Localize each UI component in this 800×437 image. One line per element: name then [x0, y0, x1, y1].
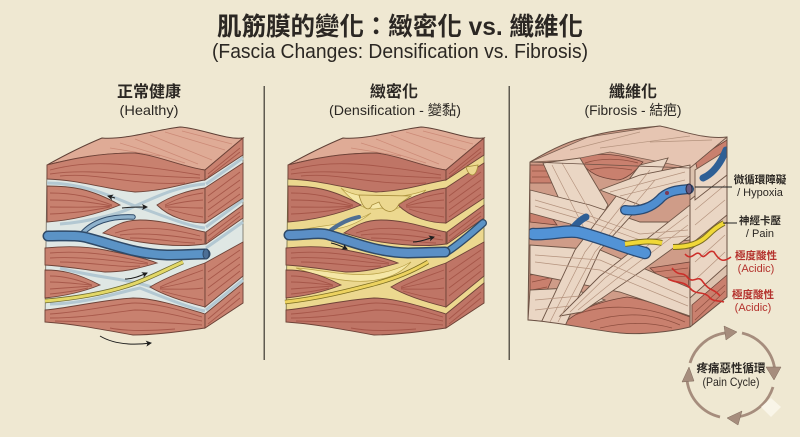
pain cycle diagram: (Pain Cycle): [702, 375, 760, 389]
pain cycle diagram: 疼痛惡性循環: [696, 361, 766, 375]
heading: densification: (Densification - 變黏): [329, 102, 461, 118]
title: [212, 12, 588, 63]
heading: densification: [329, 82, 461, 118]
heading: healthy: [117, 82, 181, 118]
title: 肌筋膜的變化：緻密化 vs. 纖維化: [217, 12, 583, 41]
acidic wave lines: [668, 251, 731, 302]
heading: healthy: 正常健康: [117, 82, 181, 101]
callout: acidic 1: [735, 249, 777, 275]
cycle arrows: [687, 333, 775, 417]
block outline: [528, 126, 727, 334]
callout: nerve compression: 神經卡壓: [739, 214, 781, 227]
panel: healthy fascia block: [45, 127, 243, 344]
block base: [528, 128, 690, 319]
blue vessel: [48, 217, 209, 259]
callout: acidic 2: 極度酸性: [732, 288, 774, 301]
heading: fibrosis: [584, 83, 682, 118]
muscle layers: [45, 138, 243, 335]
yellow nerve: [285, 262, 428, 302]
side face base: [690, 137, 727, 327]
exposed muscle patches: [530, 140, 727, 336]
glue drips: [359, 165, 478, 211]
muscle layers: [286, 138, 484, 335]
callout: nerve compression: / Pain: [746, 228, 774, 240]
callout: hypoxia: [734, 173, 787, 199]
callout: hypoxia: / Hypoxia: [737, 187, 784, 199]
heading: healthy: (Healthy): [120, 102, 178, 118]
blue vessel: [289, 217, 483, 253]
fascia layer: pale blue: [45, 138, 243, 328]
callout: nerve compression: [739, 214, 781, 240]
panel: densification block: [285, 127, 484, 335]
callout line: pain: [723, 222, 737, 224]
divider left: [264, 86, 265, 360]
callout: acidic 2: [732, 288, 774, 314]
yellow nerve: [625, 223, 724, 247]
callout: hypoxia: 微循環障礙: [734, 173, 787, 186]
panel: fibrosis block: [525, 120, 730, 340]
band fibre lines: [535, 132, 725, 322]
callout: acidic 2: (Acidic): [735, 302, 771, 314]
title: (Fascia Changes: Densification vs. Fibrosis): [212, 41, 588, 63]
muscle streaks: [532, 150, 725, 328]
arrows: [100, 196, 151, 344]
top face: [47, 127, 243, 170]
divider right: [508, 86, 510, 360]
heading: fibrosis: 纖維化: [609, 83, 657, 101]
heading: densification: 緻密化: [370, 82, 418, 101]
arrows: [331, 237, 434, 249]
arrow heads: [682, 326, 781, 425]
top face: [288, 127, 484, 170]
fibre bands: [528, 150, 727, 326]
glue highlights: [296, 188, 426, 281]
yellow nerve: [45, 262, 183, 301]
pain cycle diagram: [682, 326, 781, 425]
top surface sheet: [530, 126, 727, 168]
heading: fibrosis: (Fibrosis - 結疤): [584, 102, 682, 118]
callout: acidic 1: (Acidic): [738, 263, 774, 275]
blue vessels: [533, 150, 726, 253]
fascia layer: yellow: [286, 138, 484, 328]
callout line: hypoxia: [695, 186, 732, 188]
block edges: [530, 137, 727, 327]
callout: acidic 1: 極度酸性: [735, 249, 777, 262]
fascia shading: [47, 158, 243, 311]
icon: sparkle mark: [761, 398, 781, 417]
